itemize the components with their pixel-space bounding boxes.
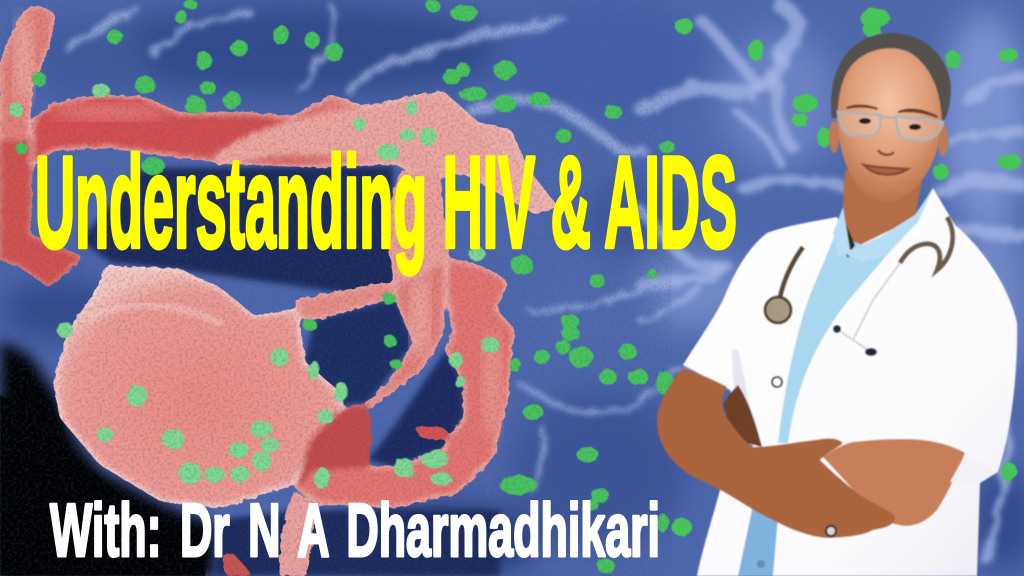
- left arm and clasped hand: [657, 368, 895, 538]
- branch strand: [296, 282, 396, 320]
- dark junction: [296, 403, 372, 490]
- ring: [826, 526, 836, 536]
- surface grain: [0, 0, 672, 576]
- small finger: [414, 425, 452, 440]
- red strand highlights: [14, 15, 502, 440]
- upper link of central strand: [388, 172, 450, 285]
- face: [836, 48, 942, 203]
- white coat body: [683, 188, 1017, 576]
- dark gaps between red strands: [0, 166, 500, 576]
- neck: [842, 169, 923, 246]
- big round cell: [55, 267, 343, 507]
- collar left: [833, 207, 886, 262]
- coat button: [772, 377, 782, 387]
- central strand: [343, 260, 446, 410]
- stethoscope: [765, 217, 953, 356]
- hair: [831, 33, 951, 122]
- shirt button: [757, 560, 765, 568]
- right curling strand: [295, 260, 514, 507]
- lower shirt: [738, 505, 778, 576]
- right forearm: [823, 439, 965, 526]
- lower left strand shading: [0, 140, 82, 287]
- hidden elbow: [723, 385, 762, 447]
- doctor portrait: [657, 33, 1017, 576]
- collar right: [880, 188, 933, 256]
- coat fold shading: [732, 350, 752, 446]
- green virus particles on red: [9, 84, 499, 489]
- ears: [829, 121, 948, 156]
- inner dark collar gap: [846, 224, 856, 258]
- upper arching strand: [32, 92, 557, 213]
- lower strands: [278, 492, 318, 576]
- eyes and brows: [846, 104, 938, 130]
- shirt placket: [778, 238, 886, 444]
- nose and smile: [864, 150, 908, 175]
- pink overlapping folds: [210, 108, 380, 166]
- left vertical strand: [0, 5, 82, 287]
- sleeve cuff: [949, 461, 962, 483]
- glasses: [838, 112, 943, 141]
- virus-infected red cell structures: [0, 5, 557, 576]
